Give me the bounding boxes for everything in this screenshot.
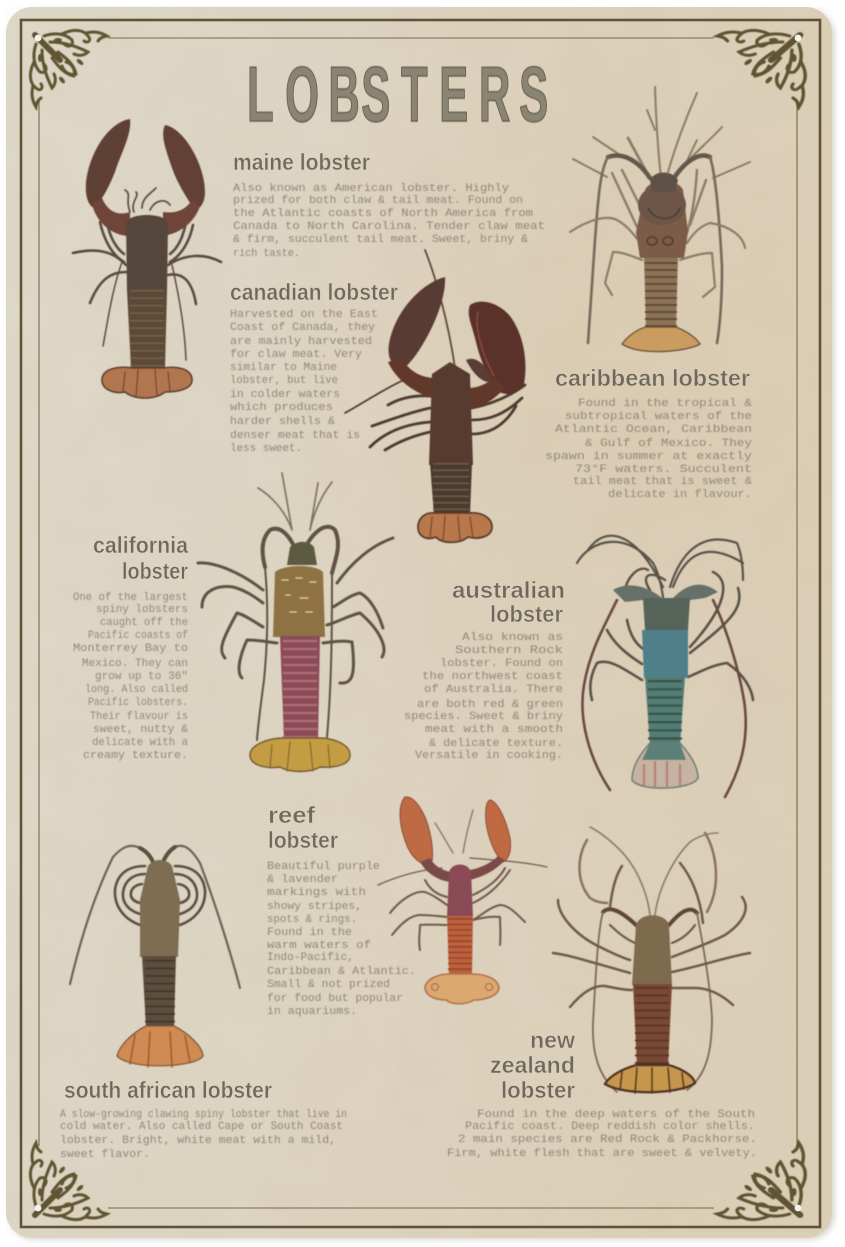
- text block: australian lobster: Southern Rock: [455, 645, 563, 657]
- text block: reef lobster: Beautiful purple: [267, 861, 380, 873]
- text block: australian lobster: the northwest coast: [422, 671, 563, 683]
- text block: australian lobster: species. Sweet & briny: [404, 711, 563, 723]
- heading: reef lobster: reef: [268, 802, 315, 828]
- text block: maine lobster: prized for both claw & tail meat. Found on: [233, 195, 523, 207]
- text block: california lobster: Pacific coasts of: [88, 630, 188, 642]
- text block: australian lobster: Also known as: [462, 632, 563, 644]
- heading: maine lobster: maine lobster: [233, 149, 370, 175]
- heading: new zealand lobster: [490, 1027, 575, 1103]
- illustration: maine lobster: [73, 119, 221, 398]
- text block: california lobster: spiny lobsters: [96, 604, 188, 616]
- text block: reef lobster: & lavender: [267, 874, 338, 886]
- illustration: new zealand lobster: [553, 827, 750, 1093]
- text block: australian lobster: & delicate texture.: [429, 738, 563, 750]
- corner ornament: top right: [717, 30, 805, 107]
- text block: california lobster: Pacific lobsters.: [88, 697, 188, 709]
- illustration: south african lobster: [70, 846, 240, 1067]
- text block: california lobster: sweet, nutty &: [93, 724, 188, 736]
- heading: new zealand lobster: lobster: [501, 1077, 575, 1103]
- text block: south african lobster: sweet flavor.: [60, 1149, 150, 1161]
- text block: australian lobster: Versatile in cooking.: [415, 750, 563, 762]
- illustration: australian lobster: [577, 536, 753, 797]
- heading: canadian lobster: canadian lobster: [230, 279, 398, 305]
- text block: canadian lobster: Harvested on the East: [230, 309, 378, 321]
- text block: new zealand lobster: [447, 1109, 757, 1160]
- text block: caribbean lobster: Atlantic Ocean, Caribbean: [555, 424, 752, 436]
- text block: maine lobster: the Atlantic coasts of North America from: [233, 208, 533, 220]
- text block: new zealand lobster: Found in the deep waters of the South: [477, 1109, 755, 1121]
- text block: reef lobster: Small & not prized: [267, 979, 390, 991]
- text block: canadian lobster: Coast of Canada, they: [230, 322, 375, 334]
- text block: australian lobster: are both red & green: [417, 699, 563, 711]
- text block: california lobster: Their flavour is: [90, 711, 188, 723]
- text block: california lobster: creamy texture.: [83, 750, 188, 762]
- text block: reef lobster: warm waters of: [267, 940, 371, 952]
- text block: south african lobster: A slow-growing clawing spiny lobster that live in: [60, 1109, 347, 1121]
- text block: australian lobster: [404, 632, 563, 762]
- heading: california lobster: lobster: [122, 558, 188, 584]
- text block: canadian lobster: in colder waters: [230, 389, 340, 401]
- text block: canadian lobster: for claw meat. Very: [230, 349, 362, 361]
- heading: south african lobster: south african lobster: [64, 1077, 272, 1103]
- corner ornament: bottom right: [717, 1143, 805, 1220]
- text block: california lobster: Mexico. They can: [82, 658, 188, 670]
- text block: caribbean lobster: spawn in summer at exactly: [545, 451, 752, 463]
- text block: new zealand lobster: Pacific coast. Deep reddish color shells.: [465, 1121, 755, 1133]
- text block: australian lobster: lobster. Found on: [440, 658, 563, 670]
- heading: caribbean lobster: caribbean lobster: [555, 365, 750, 391]
- text block: south african lobster: lobster. Bright, white meat with a mild,: [60, 1135, 336, 1147]
- illustration: canadian lobster: [345, 250, 525, 542]
- text block: california lobster: caught off the: [100, 617, 188, 629]
- text block: canadian lobster: [230, 309, 378, 455]
- heading: new zealand lobster: new: [530, 1027, 575, 1053]
- text block: south african lobster: [60, 1109, 347, 1161]
- text block: maine lobster: [233, 183, 545, 260]
- text block: canadian lobster: are mainly harvested: [230, 336, 372, 348]
- heading: reef lobster: [268, 802, 338, 853]
- text block: maine lobster: rich taste.: [233, 248, 300, 260]
- text block: caribbean lobster: 73°F waters. Succulent: [575, 464, 752, 476]
- illustration: reef lobster: [378, 797, 547, 1004]
- text block: caribbean lobster: subtropical waters of the: [565, 411, 752, 423]
- text block: australian lobster: meat with a smooth: [425, 724, 563, 736]
- corner ornament: top left: [30, 30, 107, 107]
- text block: new zealand lobster: Firm, white flesh that are sweet & velvety.: [447, 1148, 757, 1160]
- text block: caribbean lobster: delicate in flavour.: [608, 489, 752, 501]
- text block: caribbean lobster: tail meat that is sweet &: [573, 476, 752, 488]
- text block: california lobster: [73, 592, 188, 762]
- text block: reef lobster: spots & rings.: [267, 914, 357, 926]
- text block: new zealand lobster: 2 main species are Red Rock & Packhorse.: [458, 1134, 757, 1146]
- heading: australian lobster: australian: [452, 577, 565, 603]
- corner ornament: bottom left: [30, 1143, 107, 1220]
- text block: canadian lobster: which produces: [230, 402, 333, 414]
- text block: canadian lobster: harder shells &: [230, 416, 335, 428]
- heading: australian lobster: [452, 577, 565, 627]
- text block: canadian lobster: lobster, but live: [230, 375, 338, 387]
- text block: california lobster: Monterrey Bay to: [73, 643, 188, 655]
- illustration: california lobster: [198, 473, 393, 772]
- heading: california lobster: [93, 532, 188, 584]
- heading: reef lobster: lobster: [268, 827, 338, 853]
- text block: canadian lobster: denser meat that is: [230, 430, 360, 442]
- text block: california lobster: grow up to 36": [95, 671, 188, 683]
- text block: reef lobster: for food but popular: [267, 993, 403, 1005]
- text block: maine lobster: Also known as American lobster. Highly: [233, 183, 509, 195]
- text block: canadian lobster: similar to Maine: [230, 362, 337, 374]
- heading: california lobster: california: [93, 532, 188, 558]
- text block: reef lobster: Caribbean & Atlantic.: [267, 966, 416, 978]
- text block: canadian lobster: less sweet.: [230, 443, 302, 455]
- text block: reef lobster: showy stripes,: [267, 901, 362, 913]
- text block: caribbean lobster: & Gulf of Mexico. They: [585, 438, 752, 450]
- text block: caribbean lobster: Found in the tropical &: [578, 398, 752, 410]
- text block: california lobster: One of the largest: [73, 592, 188, 604]
- heading: new zealand lobster: zealand: [490, 1052, 575, 1078]
- text block: reef lobster: [267, 861, 416, 1018]
- text block: reef lobster: in aquariums.: [267, 1006, 357, 1018]
- text block: reef lobster: markings with: [267, 887, 366, 899]
- text block: california lobster: delicate with a: [92, 737, 188, 749]
- text block: caribbean lobster: [545, 398, 752, 501]
- heading: australian lobster: lobster: [490, 601, 563, 627]
- text block: maine lobster: Canada to North Carolina. Tender claw meat: [233, 221, 545, 233]
- text block: maine lobster: & firm, succulent tail meat. Sweet, briny &: [233, 234, 528, 246]
- text block: australian lobster: of Australia. There: [424, 684, 563, 696]
- text block: reef lobster: Indo-Pacific,: [267, 952, 354, 964]
- text block: california lobster: long. Also called: [85, 684, 188, 696]
- text block: south african lobster: cold water. Also called Cape or South Coast: [60, 1121, 343, 1133]
- title: LOBSTERS: [247, 52, 548, 138]
- text block: reef lobster: Found in the: [267, 927, 352, 939]
- illustration: caribbean lobster: [570, 87, 750, 352]
